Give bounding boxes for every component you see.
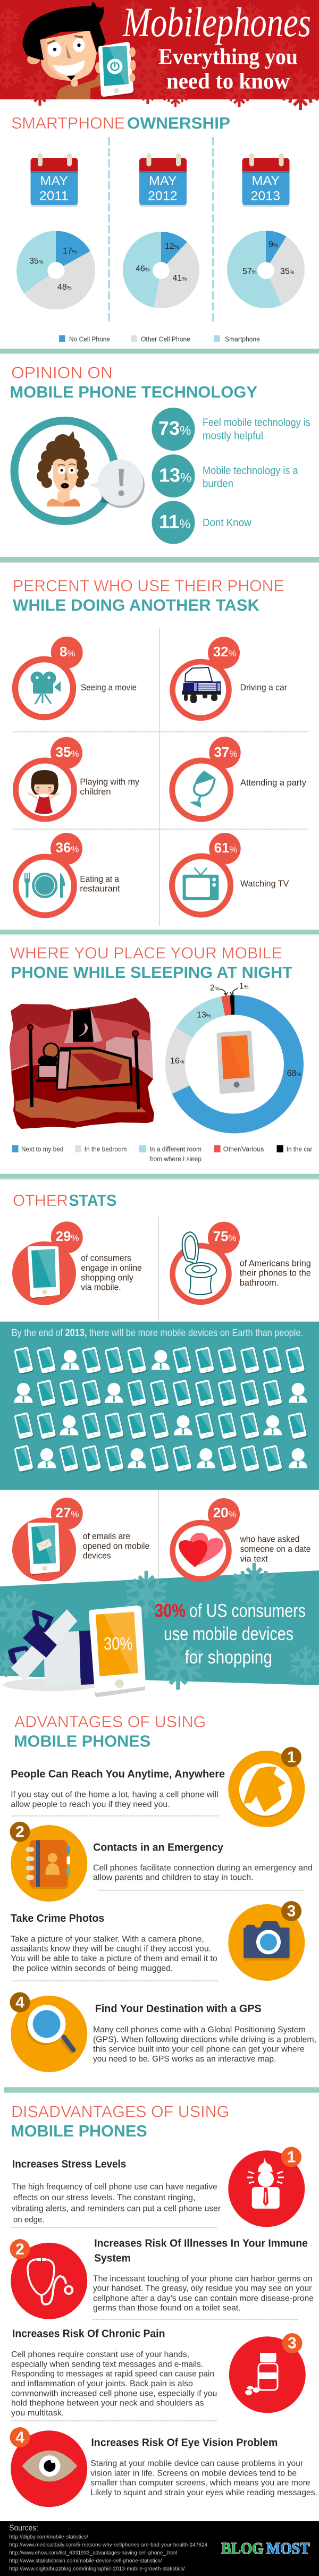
- advantage 2: contacts in an emergency: Cell phones facilitate connection during an emergency and: [93, 1863, 313, 1872]
- advantage 1: reach you anytime: People Can Reach You Anytime, Anywhere: [11, 1768, 225, 1780]
- stat: 20% asked someone on a date via text: [172, 1498, 310, 1579]
- disadvantage 3: chronic pain: hold thephone between your neck and shoulders as: [11, 2399, 204, 2408]
- advantage 1: reach you anytime: If you stay out of the home a lot, having a cell phone will: [11, 1790, 219, 1800]
- stat: 29% online shopping via mobile: engage in online: [81, 1263, 142, 1273]
- advantage 4: GPS: this service built into your cell phone can get your where: [93, 2045, 305, 2054]
- disadvantage 4: eye vision problem: Likely to squint and strain your eyes while reading messages.: [90, 2488, 317, 2497]
- heading: other stats: [13, 1191, 116, 1210]
- icon: wine glass: [190, 771, 215, 808]
- icon: phone: [28, 1246, 61, 1299]
- icon: hearts: [179, 1533, 223, 1567]
- disadvantage 1: stress levels: [12, 2147, 305, 2227]
- disadvantage 3: chronic pain: and inflammation of your joints. Back pain is also: [11, 2379, 193, 2388]
- stat: 73%: 73%: [158, 417, 191, 439]
- task: playing with children 35%: 35%: [55, 744, 79, 760]
- icon: camera: 3: [287, 1903, 296, 1920]
- disadvantage 3: chronic pain: [11, 2327, 306, 2418]
- legend: ownership: Other Cell Phone: [141, 335, 190, 343]
- advantage 4: GPS: you need to be. GPS works as an interactive map.: [93, 2055, 276, 2064]
- logo: BLOG: [221, 2539, 264, 2557]
- task: watching TV 61%: [172, 833, 289, 915]
- legend: sleeping location: Next to my bed: [21, 1145, 63, 1153]
- disadvantage 3: chronic pain: commonwith increased cell phone use, especially if you: [11, 2389, 217, 2398]
- donut chart: sleeping location: 1%: [239, 982, 249, 991]
- pie chart 2012: 46%: [136, 265, 150, 274]
- icon: address book: [10, 1822, 87, 1902]
- disadvantage 1: stress levels: on edge.: [13, 2216, 44, 2225]
- icon: phone with envelope: [28, 1523, 61, 1576]
- task: driving a car 32%: Driving a car: [240, 683, 287, 692]
- disadvantage 3: chronic pain: Cell phones require constant use of your hands,: [11, 2350, 189, 2359]
- icon: pill bottle: [229, 2333, 306, 2413]
- donut chart: sleeping location: 13%: [197, 1010, 211, 1019]
- stat: 73%: [152, 408, 310, 451]
- advantage 4: GPS: Many cell phones come with a Global Positioning System: [93, 2025, 306, 2034]
- panel: 30% shopping banner: use mobile devices: [164, 1624, 293, 1644]
- task: driving a car 32%: 32%: [213, 644, 237, 660]
- heading: smartphone ownership: SMARTPHONE: [11, 114, 125, 132]
- icon: pill bottle: 3: [288, 2334, 297, 2352]
- task: driving a car 32%: [172, 637, 287, 718]
- icon: plate and cutlery: [24, 873, 65, 898]
- legend: ownership: No Cell Phone: [69, 335, 110, 343]
- task: eating at a restaurant 36%: 36%: [55, 839, 79, 855]
- illustration: person asleep in bed: [10, 998, 154, 1129]
- calendar: May 2013: [242, 153, 289, 207]
- icon: toilet: [182, 1232, 216, 1295]
- footer: sources and logo: http://www.ehow.com/list_6331933_advantages-having-cell-phone_.html: [9, 2550, 177, 2556]
- icon: stressed person with flaming head: [228, 2147, 305, 2227]
- pie chart 2012: 12%: [165, 242, 179, 251]
- icon: stethoscope: [10, 2239, 87, 2319]
- speech bubble with exclamation mark: [90, 459, 145, 508]
- calendar: May 2012: MAY: [149, 174, 177, 188]
- stat: 29% online shopping via mobile: [12, 1221, 142, 1305]
- pie chart 2011: [28, 243, 83, 298]
- stat: 13%: 13%: [159, 464, 191, 486]
- advantage 2: contacts in an emergency: Contacts in an Emergency: [93, 1842, 224, 1854]
- task: attending a party 37%: [172, 737, 307, 819]
- legend: sleeping location: In a different room: [149, 1145, 202, 1153]
- disadvantage 2: immune system: [10, 2237, 314, 2319]
- stat: 29% online shopping via mobile: via mobile.: [81, 1283, 121, 1293]
- stat: 20% asked someone on a date via text: someone on a date: [240, 1544, 310, 1554]
- disadvantage 1: stress levels: Increases Stress Levels: [12, 2158, 126, 2170]
- stat: 29% online shopping via mobile: of consumers: [81, 1254, 131, 1263]
- donut chart: sleeping location: 68%: [287, 1069, 301, 1078]
- stat: 75% bring phones to bathroom: [172, 1222, 311, 1302]
- heading: disadvantages of using mobile phones: MOBILE PHONES: [11, 2122, 147, 2140]
- icon: magnifying glass: 4: [15, 1994, 24, 2011]
- pie chart 2013: 57%: [242, 267, 257, 276]
- pie chart 2012: 41%: [172, 274, 187, 283]
- disadvantage 1: stress levels: vibrating alerts, and reminders can put a cell phone user: [12, 2205, 221, 2214]
- stat: 13%: Mobile technology is a: [203, 465, 298, 477]
- stat: 27% emails opened on mobile: opened on mobile: [83, 1541, 149, 1551]
- pie chart 2013: [239, 240, 295, 296]
- arrows to small slices: [220, 989, 238, 995]
- calendar: May 2011: [31, 153, 78, 207]
- legend: sleeping location: In the bedroom: [85, 1145, 127, 1153]
- advantage 3: take crime photos: [11, 1901, 305, 1981]
- heading: where you place your mobile: [10, 943, 292, 982]
- legend: sleeping location: Other/Various: [223, 1145, 264, 1153]
- legend: sleeping location: In the car: [287, 1145, 313, 1153]
- pie chart 2013: 9%: [268, 240, 278, 249]
- task: eating at a restaurant 36%: Eating at a: [80, 874, 120, 884]
- heading: other stats: STATS: [69, 1191, 116, 1210]
- icon: magnifying glass: [10, 1992, 87, 2072]
- disadvantage 3: chronic pain: especially when sending text messages and e-mails.: [11, 2360, 203, 2369]
- title: [122, 0, 311, 94]
- pie chart 2011: 48%: [57, 283, 72, 292]
- disadvantage 3: chronic pain: Responding to messages at rapid speed can cause pain: [11, 2370, 214, 2379]
- advantage 3: take crime photos: Take Crime Photos: [11, 1912, 104, 1924]
- legend: ownership: [59, 335, 260, 343]
- stat: 29% online shopping via mobile: 29%: [55, 1228, 79, 1244]
- heading: disadvantages of using mobile phones: DISADVANTAGES OF USING: [11, 2102, 229, 2121]
- advantage 3: take crime photos: Take a picture of your stalker. With a camera phone,: [11, 1935, 204, 1944]
- icon: stethoscope: 2: [15, 2241, 24, 2258]
- heading: opinion on mobile phone technology: MOBILE PHONE TECHNOLOGY: [10, 383, 257, 401]
- advantage 1: reach you anytime: [11, 1747, 305, 1827]
- legend: sleeping location: from where I sleep: [149, 1155, 202, 1163]
- stat: 75% bring phones to bathroom: their phones to the: [240, 1269, 311, 1278]
- stat: 75% bring phones to bathroom: bathroom.: [240, 1278, 279, 1288]
- heading: advantages of using mobile phones: MOBILE PHONES: [14, 1732, 150, 1751]
- advantage 3: take crime photos: assailants know they will be caught if they accost you.: [11, 1945, 211, 1954]
- stat: 20% asked someone on a date via text: via text: [240, 1554, 268, 1564]
- footer: sources and logo: http://digby.com/mobile-statistics/: [9, 2534, 88, 2540]
- disadvantage 2: immune system: cellphone after a day's use can contain more disease-prone: [93, 2294, 314, 2303]
- logo: MOST: [266, 2539, 310, 2557]
- task: seeing a movie 8%: Seeing a movie: [81, 683, 137, 692]
- footer: sources and logo: Sources:: [9, 2524, 38, 2533]
- heading: advantages of using mobile phones: [14, 1712, 206, 1751]
- title: Everything you: [158, 45, 298, 70]
- heading: where you place your mobile: PHONE WHILE SLEEPING AT NIGHT: [11, 963, 292, 982]
- task: eating at a restaurant 36%: restaurant: [80, 884, 120, 894]
- footer: sources and logo: http://www.digitalbuzzblog.com/infographic-2013-mobile-growth-statistics/: [9, 2566, 185, 2572]
- stat: 20% asked someone on a date via text: who have asked: [240, 1535, 299, 1544]
- stat: 11%: [152, 501, 251, 544]
- advantage 1: reach you anytime: allow people to reach you if they need you.: [11, 1800, 170, 1809]
- disadvantage 1: stress levels: effects on our stress levels. The constant ringing,: [13, 2193, 195, 2202]
- task: watching TV 61%: 61%: [214, 840, 238, 856]
- logo: [221, 2539, 310, 2557]
- pie chart 2012: [134, 242, 188, 297]
- pie chart 2011: 17%: [63, 247, 77, 256]
- stat: 29% online shopping via mobile: shopping only: [81, 1273, 133, 1282]
- heading: percent who use their phone: WHILE DOING ANOTHER TASK: [13, 596, 260, 614]
- calendar: May 2013: MAY: [252, 174, 280, 188]
- panel: more mobile devices than people: [0, 1322, 319, 1490]
- disadvantage 2: immune system: The incessant touching of your phone can harbor germs on: [93, 2275, 312, 2284]
- bed: [28, 1025, 139, 1109]
- heading: percent who use their phone: PERCENT WHO USE THEIR PHONE: [13, 576, 284, 595]
- icon: eye: 4: [15, 2429, 24, 2446]
- stat: 73%: mostly helpful: [203, 430, 263, 442]
- task: eating at a restaurant 36%: [15, 833, 120, 915]
- task: playing with children 35%: [15, 737, 140, 819]
- stat: 75% bring phones to bathroom: 75%: [213, 1228, 237, 1244]
- advantage 2: contacts in an emergency: allow parents and children to stay in touch.: [93, 1873, 253, 1882]
- icon: blue truck: [182, 668, 221, 703]
- pie chart 2013: 35%: [280, 267, 295, 276]
- panel: 30% shopping banner: 30%: [155, 1600, 186, 1621]
- icon: orange globe: [228, 1747, 305, 1827]
- icon: eye: [10, 2427, 87, 2507]
- icon: movie camera: [31, 672, 61, 704]
- calendar: May 2011: 2011: [39, 189, 69, 204]
- illustration: surprised woman in ring with speech bubble: [14, 421, 145, 521]
- disadvantage 4: eye vision problem: Increases Risk Of Eye Vision Problem: [91, 2437, 278, 2449]
- panel: 30% shopping banner: [0, 1563, 319, 1697]
- footer: sources and logo: http://www.medicaldaily.com/5-reasons-why-cellphones-are-bad-your-health-247624: [9, 2542, 207, 2548]
- advantage 4: GPS: [10, 1992, 316, 2072]
- heading: other stats: OTHER: [13, 1191, 68, 1210]
- footer: sources and logo: http://www.statisticbrain.com/mobile-device-cell-phone-statistics/: [9, 2557, 162, 2564]
- heading: opinion on mobile phone technology: OPINION ON: [11, 364, 113, 382]
- calendar: May 2012: 2012: [148, 189, 178, 204]
- stat: 13%: burden: [203, 478, 233, 490]
- icon: camera: [228, 1901, 305, 1981]
- heading: opinion on mobile phone technology: [10, 364, 257, 401]
- stat: 11%: Dont Know: [203, 517, 251, 529]
- header banner: [0, 0, 319, 110]
- disadvantage 2: immune system: your handset. The greasy, oily residue you may see on your: [93, 2284, 312, 2293]
- title: need to know: [166, 70, 290, 94]
- task: attending a party 37%: Attending a party: [240, 778, 307, 788]
- decorative snowflake pattern: [0, 0, 319, 110]
- icon: television: [183, 868, 219, 900]
- legend: sleeping location: [12, 1145, 313, 1163]
- task: seeing a movie 8%: 8%: [60, 644, 75, 660]
- task: attending a party 37%: 37%: [214, 744, 238, 760]
- calendar: May 2013: 2013: [251, 189, 280, 204]
- stat: 27% emails opened on mobile: 27%: [55, 1505, 79, 1521]
- pictogram grid of phones and people: [14, 1347, 308, 1473]
- stat: 75% bring phones to bathroom: of Americans bring: [240, 1259, 311, 1268]
- advantage 3: take crime photos: the police within seconds of being mugged.: [13, 1964, 173, 1973]
- donut chart: sleeping location: 16%: [170, 1057, 184, 1066]
- stat: 73%: Feel mobile technology is: [203, 417, 310, 429]
- advantage 3: take crime photos: You will be able to take a picture of them and email it to: [11, 1954, 217, 1963]
- task: seeing a movie 8%: [15, 637, 137, 717]
- icon: gift box and phone: [3, 1606, 146, 1697]
- disadvantage 4: eye vision problem: [10, 2427, 317, 2507]
- icon: little girl: [28, 770, 60, 814]
- window with curtains: [64, 1008, 103, 1043]
- disadvantage 2: immune system: Increases Risk Of Illnesses In Your Immune: [94, 2237, 308, 2250]
- disadvantage 2: immune system: germs than those found on a toilet seat.: [93, 2303, 241, 2312]
- icon: address book: 2: [15, 1823, 24, 1841]
- advantage 2: contacts in an emergency: [10, 1822, 313, 1902]
- stat: 27% emails opened on mobile: [12, 1498, 149, 1582]
- footer: sources and logo: [0, 2521, 319, 2576]
- heading: smartphone ownership: OWNERSHIP: [127, 114, 230, 132]
- task: playing with children 35%: Playing with my: [80, 778, 140, 787]
- disadvantage 4: eye vision problem: Staring at your mobile device can cause problems in your: [90, 2459, 304, 2468]
- stat: 11%: 11%: [159, 511, 190, 533]
- donut chart: sleeping location: [153, 982, 316, 1146]
- heading: where you place your mobile: WHERE YOU PLACE YOUR MOBILE: [10, 943, 282, 962]
- advantage 4: GPS: (GPS). When following directions while driving is a problem,: [93, 2035, 316, 2044]
- disadvantage 2: immune system: System: [94, 2252, 131, 2265]
- icon: orange globe: 1: [287, 1749, 296, 1766]
- disadvantage 1: stress levels: The high frequency of cell phone use can have negative: [12, 2182, 217, 2191]
- icon: gift box and phone: 30%: [104, 1634, 133, 1653]
- stat: 27% emails opened on mobile: devices: [83, 1551, 111, 1561]
- calendar: May 2011: MAY: [40, 174, 68, 188]
- heading: percent who use their phone: [13, 576, 284, 614]
- disadvantage 4: eye vision problem: smaller than computer screens, which means you are more: [90, 2479, 310, 2488]
- stat: 13%: [152, 454, 298, 497]
- legend: ownership: Smartphone: [225, 335, 260, 343]
- decorative snowflakes: [0, 1563, 319, 1690]
- icon: stressed person with flaming head: 1: [287, 2148, 296, 2166]
- stat: 20% asked someone on a date via text: 20%: [213, 1505, 237, 1521]
- stat: 27% emails opened on mobile: of emails are: [83, 1532, 130, 1541]
- calendar: May 2012: [139, 153, 187, 207]
- heading: disadvantages of using mobile phones: [11, 2102, 229, 2140]
- heading: smartphone ownership: [11, 114, 230, 132]
- advantage 4: GPS: Find Your Destination with a GPS: [95, 2003, 262, 2015]
- disadvantage 4: eye vision problem: vision later in life. Screens on mobile devices tend to be: [90, 2469, 297, 2478]
- disadvantage 3: chronic pain: Increases Risk Of Chronic Pain: [12, 2327, 165, 2339]
- pie chart 2011: 35%: [29, 257, 44, 266]
- panel: 30% shopping banner: for shopping: [185, 1647, 272, 1668]
- icon: orange phone: [217, 1031, 255, 1094]
- heading: advantages of using mobile phones: ADVANTAGES OF USING: [14, 1712, 206, 1731]
- cartoon boy holding phone: [22, 2, 136, 99]
- task: watching TV 61%: Watching TV: [240, 879, 289, 889]
- task: playing with children 35%: children: [80, 787, 111, 797]
- disadvantage 3: chronic pain: you multitask.: [11, 2409, 64, 2418]
- donut chart: sleeping location: 2%: [210, 983, 220, 992]
